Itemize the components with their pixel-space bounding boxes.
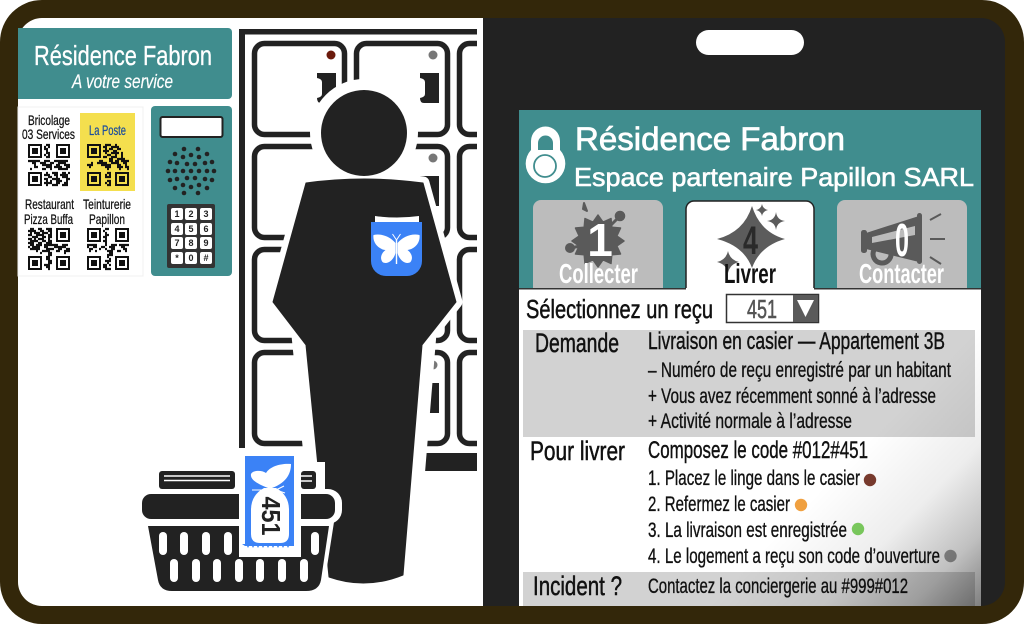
intercom keypad: 9 [203,238,209,248]
status dots [795,474,957,562]
phone slot [696,30,804,55]
basket rim [142,494,335,519]
intercom display [160,117,222,137]
panel: QR code directory [18,107,143,276]
icon: butterfly [373,234,420,264]
section: Incident: Incident ? [533,571,622,601]
QR code: Bricolage [28,144,70,186]
label: La Poste: La Poste [89,122,126,138]
intercom speaker [166,147,216,195]
content area [519,288,981,606]
dropdown [726,294,818,324]
icon: sparkle [717,204,785,273]
intercom keypad: 3 [203,209,209,219]
section: Pour livrer: Pour livrer [530,436,625,466]
receipt selector: Sélectionnez un reçu [526,294,713,324]
label: Restaurant [24,196,74,227]
icon: megaphone [861,213,945,264]
lockers [239,29,477,471]
intercom keypad: 0 [188,253,194,263]
intercom keypad: 8 [188,238,194,248]
section: Demande: Demande [535,328,619,358]
label: Bricolage [22,112,75,142]
section: Pour livrer: 3. La livraison est enregistrée [648,519,847,542]
laundry basket [137,462,342,596]
label: Restaurant: Pizza Buffa [24,211,73,227]
label: Restaurant: Restaurant [25,196,74,212]
section: Demande [523,328,975,437]
dropdown: 451 [747,294,777,324]
phone subtitle: Espace partenaire Papillon SARL [574,162,974,192]
phone title: Résidence Fabron [575,121,845,157]
section: Incident [523,571,975,606]
label: Bricolage: Bricolage [28,112,70,128]
tab label: Collecter [559,258,638,289]
QR code: Restaurant [28,228,70,270]
label: Teinturerie: Teinturerie [83,196,131,212]
QR code: Teinturerie [87,228,129,270]
highlight: La Poste [80,113,135,191]
ticket bag [251,488,289,543]
tab label: Contacter [859,258,944,289]
intercom keypad: * [175,253,179,263]
intercom keypad: 5 [188,224,194,234]
tab: Livrer [686,201,814,291]
ticket number: 451 [256,496,286,536]
intercom keypad: 2 [188,209,194,219]
icon: splat [566,203,625,267]
tab count: 0 [895,214,909,266]
person head [321,90,407,176]
section: Pour livrer: Composez le code #012#451 [648,437,868,464]
icon: ticket butterfly [251,464,291,488]
section: Pour livrer [530,436,957,568]
tab count: 4 [743,219,759,263]
tab: Collecter [533,200,663,289]
intercom keypad: 7 [174,238,180,248]
icon: padlock [526,127,565,183]
person [273,79,456,583]
pocket with butterfly badge [371,216,422,276]
phone header [519,110,981,290]
residence sign: Résidence Fabron [34,40,212,71]
label: Teinturerie: Papillon [89,211,125,227]
tab label: Livrer [724,258,776,289]
section: Pour livrer: 1. Placez le linge dans le casier [648,467,860,490]
laundry ticket 451 [239,450,301,557]
intercom keypad: 4 [174,224,180,234]
basket slots [159,532,319,582]
person body [273,179,456,583]
residence sign: A votre service [71,72,173,93]
residence sign [18,28,232,99]
locker status lights [326,50,438,370]
basket body [148,526,329,591]
locker handles [317,73,439,413]
intercom keypad: 1 [174,209,180,219]
intercom keypad [167,204,215,268]
intercom keypad: 6 [203,224,209,234]
screen glare shading [519,289,981,606]
section: Pour livrer: 2. Refermez le casier [648,493,790,516]
phone screen [519,110,981,606]
intercom keypad: # [203,253,209,263]
intercom [151,106,232,276]
folded laundry [159,471,316,489]
section: Demande: + Activité normale à l’adresse [648,410,852,433]
tab: Contacter [837,200,967,289]
label: Teinturerie [83,196,131,227]
section: Incident: Contactez la conciergerie au #999#012 [648,575,908,598]
label: Bricolage: 03 Services [22,126,75,142]
QR code: La Poste [87,144,129,186]
tab count: 1 [587,214,613,266]
